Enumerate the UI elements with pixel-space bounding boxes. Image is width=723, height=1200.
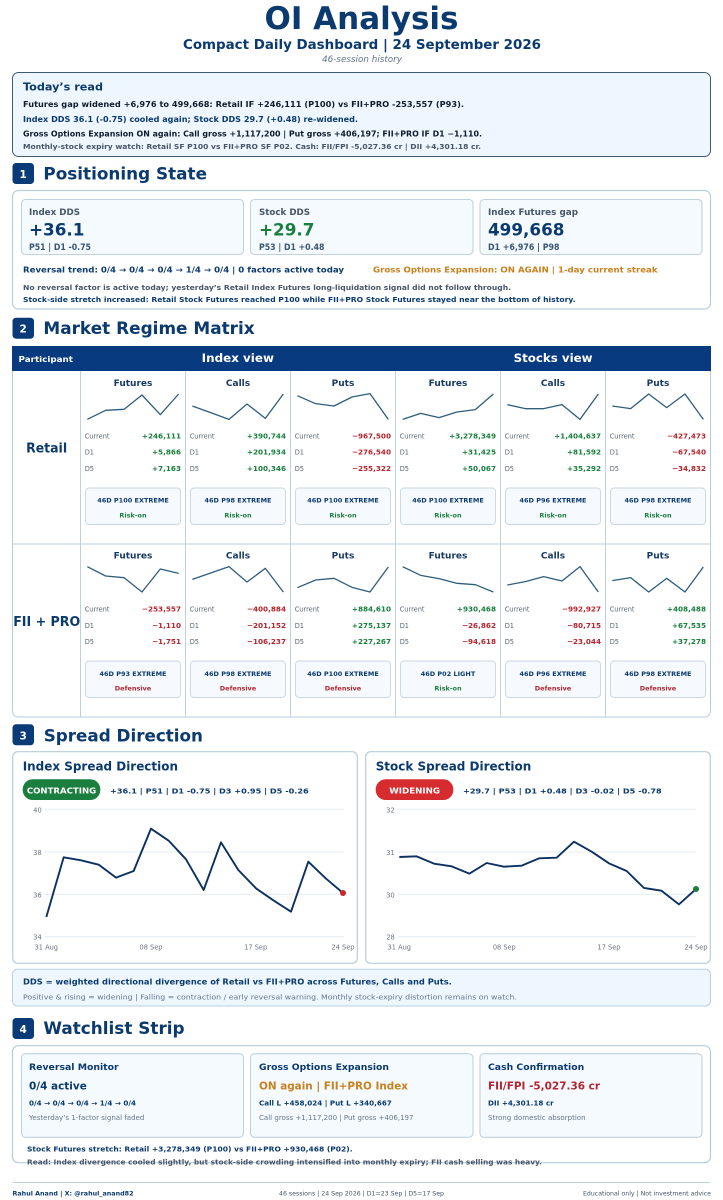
- matrix header: Stocks view: [514, 351, 593, 365]
- cell: Retail stock puts: −427,473: [667, 431, 706, 440]
- subtitle: Compact Daily Dashboard | 24 September 2026: [183, 38, 541, 53]
- cell: FII+PRO stock puts: D5: [610, 638, 619, 646]
- cell: Retail stock puts: D5: [610, 465, 619, 473]
- sparkline: [507, 567, 598, 592]
- cell: FII+PRO index futures: −1,110: [152, 621, 181, 630]
- badge: Defensive: [535, 685, 572, 693]
- cell: FII+PRO stock futures: −26,862: [462, 621, 496, 630]
- line chart: index: [33, 806, 354, 952]
- cell: FII+PRO index futures: D5: [85, 638, 94, 646]
- badge: [86, 661, 180, 698]
- panel heading: Stock Spread Direction: [376, 760, 531, 774]
- card: reversal monitor: Yesterday’s 1-factor signal faded: [28, 1114, 144, 1122]
- sparkline: [297, 394, 388, 419]
- sparkline: [507, 394, 598, 419]
- badge: Risk-on: [644, 511, 672, 519]
- card: gross options expansion: Gross Options Expansion: [259, 1062, 389, 1073]
- cell: FII+PRO stock calls: D1: [505, 622, 514, 630]
- cell: FII+PRO index calls: −106,237: [247, 637, 286, 646]
- line chart: index: 24 Sep: [332, 944, 354, 952]
- card: cash confirmation: DII +4,301.18 cr: [488, 1100, 554, 1108]
- sparkline: [192, 567, 283, 592]
- cell: FII+PRO index calls: [190, 552, 286, 698]
- cell: Retail index calls: D5: [190, 465, 199, 473]
- cell: Retail index puts: −967,500: [352, 431, 391, 440]
- badge: 46D P98 EXTREME: [624, 497, 692, 505]
- badge: [610, 661, 706, 698]
- cell: FII+PRO index calls: D5: [190, 638, 199, 646]
- title: OI Analysis: [264, 1, 458, 37]
- cell: Retail stock puts: D1: [610, 448, 619, 456]
- badge: [190, 661, 286, 698]
- cell: FII+PRO index puts: +275,137: [352, 621, 391, 630]
- matrix header: Index view: [202, 351, 274, 365]
- cell: Retail stock puts: Current: [610, 432, 635, 440]
- badge: [610, 488, 706, 524]
- badge: Defensive: [325, 685, 362, 693]
- cell: FII+PRO index calls: −201,152: [247, 621, 286, 630]
- panel: watchlist strip: [12, 1046, 710, 1167]
- note: reversal: No reversal factor is active today; yesterday’s Retail Index Futures long-liquidation signal did not follow through.: [23, 283, 511, 292]
- cell: Retail index puts: −255,322: [352, 464, 391, 473]
- badge: 46D P98 EXTREME: [624, 670, 692, 678]
- badge: [296, 488, 390, 524]
- line chart: index: 38: [33, 849, 42, 857]
- cell: Retail stock puts: −67,540: [672, 447, 706, 456]
- cell: Retail index calls: [190, 379, 286, 524]
- reversal trend: Reversal trend: 0/4 → 0/4 → 0/4 → 1/4 → 0/4 | 0 factors active today: [23, 266, 344, 274]
- card: reversal monitor: 0/4 → 0/4 → 0/4 → 1/4 → 0/4: [29, 1100, 136, 1108]
- sparkline: [612, 567, 703, 592]
- card: reversal monitor: Reversal Monitor: [29, 1062, 119, 1073]
- cell: FII+PRO stock futures: Current: [400, 606, 425, 614]
- cell: Retail stock calls: +35,292: [567, 464, 601, 473]
- cell: FII+PRO index futures: −253,557: [142, 605, 181, 614]
- badge: 46D P98 EXTREME: [204, 497, 272, 505]
- cell: Retail index calls: Calls: [226, 379, 250, 389]
- note: stock stretch: Stock-side stretch increased: Retail Stock Futures reached P100 while FII+PRO Stock Futures stayed near the bottom of history.: [23, 295, 576, 304]
- cell: FII+PRO index calls: −400,884: [247, 605, 286, 614]
- section 3 heading: Spread Direction: [44, 725, 203, 745]
- cell: FII+PRO stock puts: +67,535: [672, 621, 706, 630]
- card: gross options expansion: Call gross +1,117,200 | Put gross +406,197: [259, 1114, 414, 1122]
- section 4 heading: 4: [20, 1024, 27, 1036]
- section 1 heading: Positioning State: [43, 164, 207, 184]
- cell: FII+PRO stock futures: D5: [400, 638, 409, 646]
- sparkline: [297, 567, 388, 592]
- card: index DDS: +36.1: [29, 220, 84, 240]
- text: expiry watch: Monthly-stock expiry watch: Retail SF P100 vs FII+PRO SF P02. Cash: FII/FPI -5,027.36 cr | DII +4,301.18 cr.: [23, 142, 481, 152]
- line chart: stock: 31: [386, 849, 395, 857]
- badge: [86, 488, 180, 524]
- footer: disclaimer: Educational only | Not investment advice: [583, 1192, 711, 1198]
- badge: 46D P100 EXTREME: [307, 670, 379, 678]
- badge: Risk-on: [224, 511, 252, 519]
- cell: FII+PRO index calls: Calls: [226, 552, 250, 562]
- line chart: index: 17 Sep: [244, 944, 267, 952]
- cell: FII+PRO index puts: Current: [295, 606, 320, 614]
- card: cash confirmation: Strong domestic absorption: [488, 1114, 586, 1122]
- footer: author: Rahul Anand | X: @rahul_anand82: [12, 1190, 134, 1199]
- line chart: stock: 08 Sep: [493, 944, 516, 952]
- callout: DDS definition: DDS = weighted directional divergence of Retail vs FII+PRO across Futures, Calls and Puts.: [23, 978, 452, 987]
- cell: Retail index puts: D5: [295, 465, 304, 473]
- cell: Retail index futures: +7,163: [152, 464, 181, 473]
- badge: Risk-on: [434, 511, 462, 519]
- card: reversal monitor: 0/4 active: [29, 1080, 87, 1092]
- cell: FII+PRO stock puts: D1: [610, 622, 619, 630]
- panel: stock spread direction: [366, 752, 710, 963]
- text: DDS: Index DDS 36.1 (-0.75) cooled again; Stock DDS 29.7 (+0.48) re-widened.: [23, 115, 358, 124]
- line chart: stock: [386, 806, 707, 952]
- cell: FII+PRO index puts: Puts: [332, 552, 354, 562]
- badge: [296, 661, 390, 698]
- card: cash confirmation: FII/FPI -5,027.36 cr: [488, 1080, 601, 1092]
- cell: FII+PRO stock calls: −992,927: [562, 605, 601, 614]
- cell: FII+PRO stock puts: +408,488: [667, 605, 706, 614]
- stats: +36.1 | P51 | D1 -0.75 | D3 +0.95 | D5 -0.26: [110, 787, 309, 797]
- badge: Defensive: [115, 685, 152, 693]
- cell: FII+PRO stock calls: −23,044: [567, 637, 601, 646]
- cell: FII+PRO index futures: −1,751: [152, 637, 181, 646]
- card: index DDS: Index DDS: [29, 208, 80, 218]
- cell: Retail index calls: Current: [190, 432, 215, 440]
- cell: FII+PRO index futures: Current: [85, 606, 110, 614]
- badge: 46D P100 EXTREME: [307, 497, 379, 505]
- line chart: stock: 28: [386, 934, 395, 942]
- heading: today's read: Today’s read: [23, 80, 103, 94]
- row label: FII + PRO: FII + PRO: [13, 615, 80, 630]
- cell: Retail index calls: +390,744: [247, 431, 286, 440]
- cell: FII+PRO stock puts: Current: [610, 606, 635, 614]
- line chart: index: 36: [33, 891, 42, 899]
- card: stock DDS: Stock DDS: [259, 208, 310, 218]
- cell: Retail index calls: +100,346: [247, 464, 286, 473]
- cell: Retail stock calls: [505, 379, 601, 524]
- card: reversal monitor: [22, 1054, 244, 1137]
- matrix header: Participant: [18, 355, 73, 364]
- line chart: index: 31 Aug: [35, 944, 58, 952]
- panel: positioning state: [12, 190, 710, 309]
- cell: Retail stock calls: D1: [505, 448, 514, 456]
- badge: [400, 661, 496, 698]
- badge: 46D P98 EXTREME: [204, 670, 272, 678]
- gross options status: Gross Options Expansion: ON AGAIN | 1-day current streak: [373, 266, 658, 274]
- cell: Retail stock futures: +50,067: [462, 464, 496, 473]
- section 2 heading: Market Regime Matrix: [43, 318, 255, 338]
- stats: +29.7 | P53 | D1 +0.48 | D3 -0.02 | D5 -0.78: [463, 787, 662, 797]
- cell: FII+PRO index puts: [295, 552, 391, 698]
- panel: index spread direction: [13, 752, 357, 963]
- matrix header: [12, 346, 711, 371]
- cell: FII+PRO index puts: D5: [295, 638, 304, 646]
- cell: FII+PRO stock puts: +37,278: [672, 637, 706, 646]
- cell: FII+PRO stock futures: −94,618: [462, 637, 496, 646]
- card: gross options expansion: Call L +458,024 | Put L +340,667: [259, 1100, 392, 1109]
- cell: FII+PRO stock calls: Current: [505, 606, 530, 614]
- section 1 heading: 1: [20, 169, 27, 181]
- cell: FII+PRO stock calls: −80,715: [567, 621, 601, 630]
- cell: FII+PRO index puts: +884,610: [352, 605, 391, 614]
- stock futures stretch: Stock Futures stretch: Retail +3,278,349 (P100) vs FII+PRO +930,468 (P02).: [27, 1145, 353, 1154]
- cell: FII+PRO stock puts: [610, 552, 706, 698]
- cell: FII+PRO stock futures: +930,468: [457, 605, 496, 614]
- cell: Retail index puts: D1: [295, 448, 304, 456]
- session note: 46-session history: [322, 55, 403, 65]
- pill: contracting: CONTRACTING: [27, 787, 96, 796]
- cell: Retail stock futures: Futures: [429, 379, 467, 389]
- cell: FII+PRO index puts: +227,267: [352, 637, 391, 646]
- cell: Retail index futures: Current: [85, 432, 110, 440]
- cell: Retail index calls: D1: [190, 448, 199, 456]
- cell: Retail stock futures: +3,278,349: [449, 431, 496, 440]
- cell: Retail index futures: Futures: [114, 379, 152, 389]
- text: futures gap: Futures gap widened +6,976 to 499,668: Retail IF +246,111 (P100) vs FII+PRO -253,557 (P93).: [23, 100, 464, 109]
- callout: DDS definition: [12, 969, 710, 1006]
- cell: FII+PRO stock puts: Puts: [647, 552, 669, 562]
- badge: Defensive: [640, 685, 677, 693]
- badge: 46D P93 EXTREME: [99, 670, 167, 678]
- sparkline: [87, 394, 179, 419]
- cell: Retail index futures: D1: [85, 448, 94, 456]
- card: index DDS: P51 | D1 -0.75: [29, 242, 91, 252]
- sparkline: [612, 394, 703, 419]
- card: stock DDS: [250, 200, 473, 254]
- cell: FII+PRO stock futures: [400, 552, 496, 698]
- badge: [400, 488, 496, 524]
- card: index futures gap: 499,668: [488, 220, 564, 240]
- line chart: index: 08 Sep: [140, 944, 162, 952]
- cell: Retail index futures: +246,111: [142, 431, 181, 440]
- card: cash confirmation: Cash Confirmation: [488, 1062, 584, 1073]
- footer: sessions: 46 sessions | 24 Sep 2026 | D1=23 Sep | D5=17 Sep: [279, 1192, 444, 1198]
- callout: DDS definition: Positive & rising = widening | Falling = contraction / early reversal warning. Monthly stock-expiry distortion remains on watch.: [23, 992, 517, 1001]
- cell: FII+PRO index futures: [85, 552, 181, 698]
- line chart: index: 40: [33, 806, 42, 814]
- badge: [190, 488, 286, 524]
- sparkline: [192, 394, 283, 419]
- sparkline: [403, 567, 493, 592]
- line chart: stock: 17 Sep: [598, 944, 620, 952]
- card: cash confirmation: [480, 1054, 702, 1137]
- cell: Retail stock calls: Current: [505, 432, 530, 440]
- card: index futures gap: [480, 200, 702, 254]
- card: index futures gap: Index Futures gap: [488, 208, 578, 218]
- cell: FII+PRO index futures: D1: [85, 622, 94, 630]
- line chart: stock: 24 Sep: [685, 944, 707, 952]
- badge: 46D P02 LIGHT: [421, 670, 476, 678]
- badge: Defensive: [220, 685, 257, 693]
- card: stock DDS: P53 | D1 +0.48: [259, 242, 325, 252]
- card: gross options expansion: ON again | FII+PRO Index: [259, 1080, 408, 1092]
- cell: Retail index puts: −276,540: [352, 447, 391, 456]
- row label: Retail: Retail: [26, 442, 67, 457]
- cell: Retail index puts: [295, 379, 391, 524]
- line chart: index: 34: [33, 934, 42, 942]
- cell: Retail stock puts: [610, 379, 706, 524]
- read note: Read: Index divergence cooled slightly, but stock-side crowding intensified into monthly expiry; FII cash selling was heavy.: [27, 1158, 542, 1167]
- card: gross options expansion: [250, 1054, 473, 1137]
- cell: FII+PRO stock futures: Futures: [429, 552, 467, 562]
- line chart: stock: 31 Aug: [388, 944, 411, 952]
- cell: Retail stock puts: −34,832: [672, 464, 706, 473]
- section 4 heading: Watchlist Strip: [43, 1018, 185, 1038]
- section 2 heading: 2: [20, 324, 27, 336]
- cell: Retail stock calls: Calls: [541, 379, 565, 389]
- badge: Risk-on: [329, 511, 357, 519]
- cell: Retail index futures: D5: [85, 465, 94, 473]
- sparkline: [403, 394, 493, 419]
- cell: Retail stock calls: D5: [505, 465, 514, 473]
- cell: Retail stock calls: +81,592: [567, 447, 601, 456]
- cell: FII+PRO stock calls: Calls: [541, 552, 565, 562]
- badge: 46D P100 EXTREME: [412, 497, 484, 505]
- badge: Risk-on: [119, 511, 147, 519]
- badge: 46D P96 EXTREME: [519, 670, 587, 678]
- cell: Retail stock futures: Current: [400, 432, 425, 440]
- cell: Retail index puts: Current: [295, 432, 320, 440]
- cell: Retail stock puts: Puts: [647, 379, 669, 389]
- pill: widening: [376, 779, 453, 800]
- badge: [506, 661, 600, 698]
- cell: FII+PRO index futures: Futures: [114, 552, 152, 562]
- badge: [506, 488, 600, 524]
- badge: 46D P96 EXTREME: [519, 497, 587, 505]
- panel heading: Index Spread Direction: [23, 760, 178, 774]
- card: index DDS: [22, 200, 244, 254]
- cell: FII+PRO index calls: D1: [190, 622, 199, 630]
- card: index futures gap: D1 +6,976 | P98: [488, 242, 560, 252]
- panel: today's read: [12, 72, 710, 156]
- cell: Retail stock futures: D1: [400, 448, 409, 456]
- section 3 heading: 3: [20, 730, 27, 742]
- card: stock DDS: +29.7: [259, 220, 314, 240]
- cell: Retail index futures: [85, 379, 181, 524]
- text: gross options: Gross Options Expansion ON again: Call gross +1,117,200 | Put gross +406,197; FII+PRO IF D1 −1,110.: [23, 130, 482, 138]
- line chart: stock: 32: [386, 806, 395, 814]
- pill: widening: WIDENING: [389, 787, 440, 796]
- cell: Retail index futures: +5,866: [152, 447, 181, 456]
- sparkline: [87, 567, 179, 592]
- cell: FII+PRO stock futures: D1: [400, 622, 409, 630]
- cell: Retail index calls: +201,934: [247, 447, 286, 456]
- cell: Retail stock calls: +1,404,637: [554, 431, 601, 440]
- badge: Risk-on: [434, 685, 462, 693]
- cell: Retail stock futures: [400, 379, 496, 524]
- cell: Retail stock futures: +31,425: [462, 447, 496, 456]
- cell: FII+PRO index calls: Current: [190, 606, 215, 614]
- cell: Retail stock futures: D5: [400, 465, 409, 473]
- cell: FII+PRO index puts: D1: [295, 622, 304, 630]
- cell: Retail index puts: Puts: [332, 379, 354, 389]
- badge: 46D P100 EXTREME: [97, 497, 169, 505]
- panel: market regime matrix: [12, 346, 711, 717]
- badge: Risk-on: [539, 511, 567, 519]
- pill: contracting: [23, 779, 100, 800]
- cell: FII+PRO stock calls: [505, 552, 601, 698]
- line chart: stock: 30: [386, 891, 395, 899]
- cell: FII+PRO stock calls: D5: [505, 638, 514, 646]
